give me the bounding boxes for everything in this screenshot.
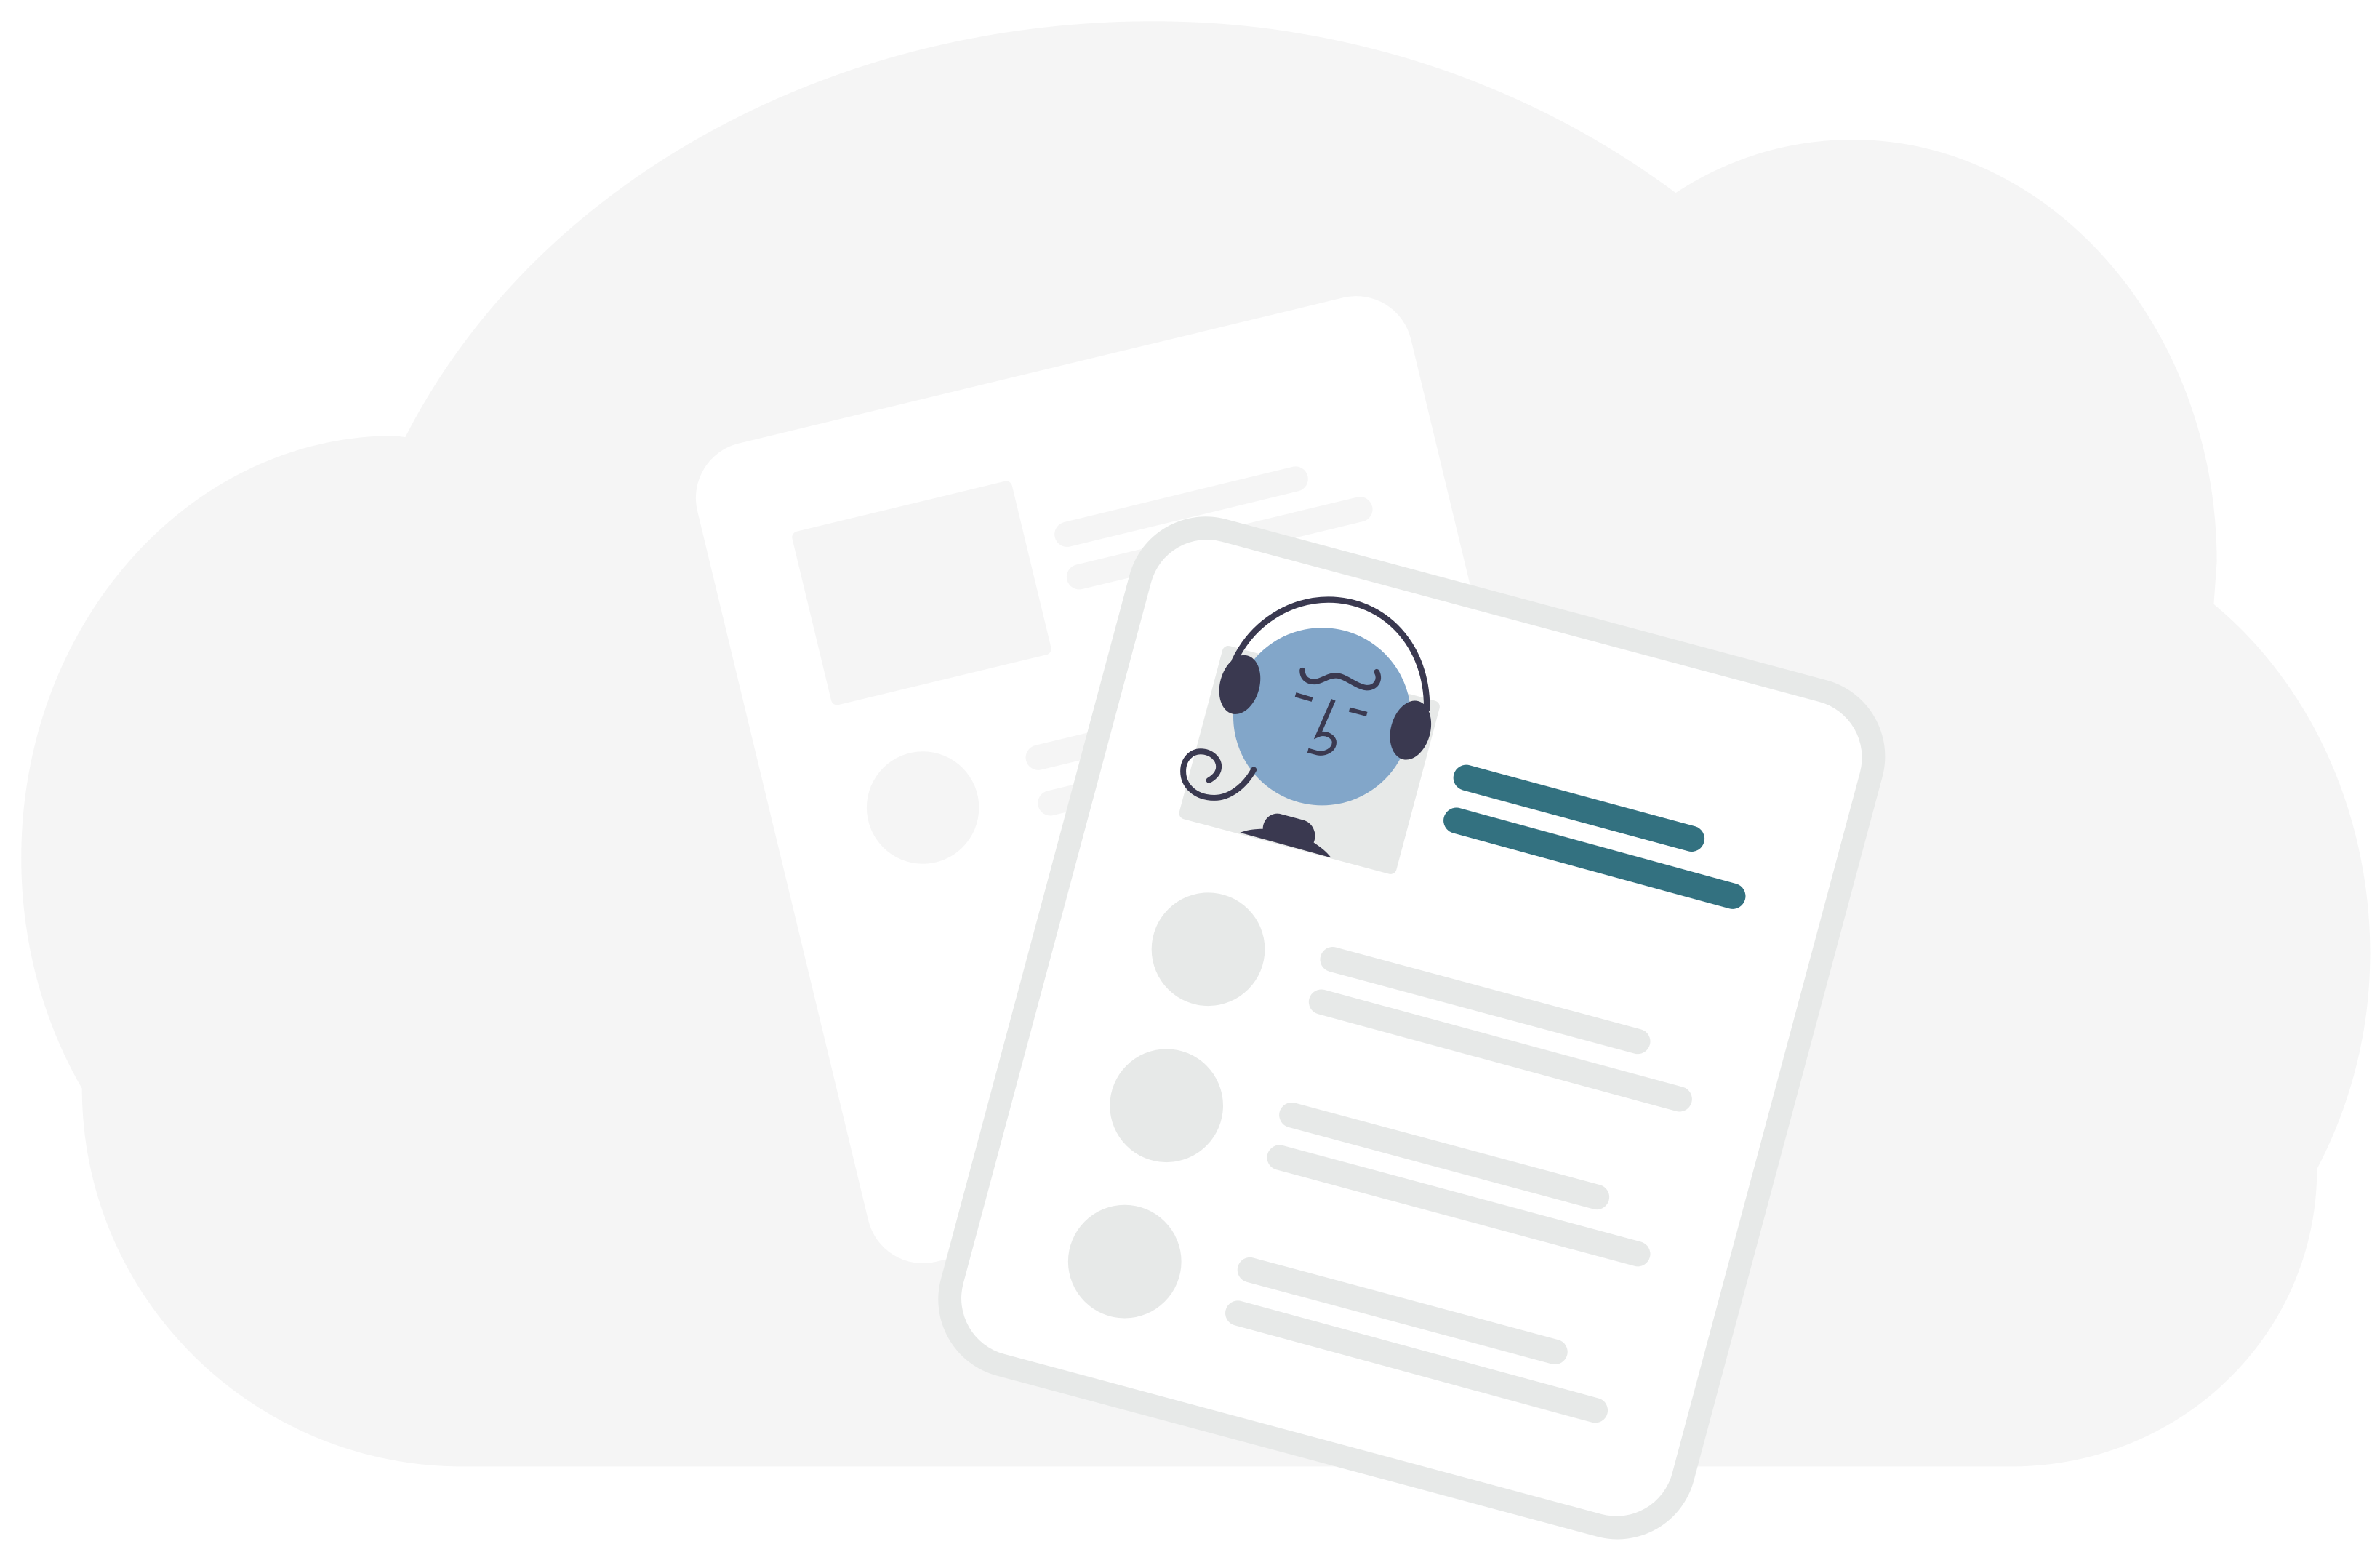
eyes xyxy=(1296,695,1367,714)
list row 2 xyxy=(1110,1049,1638,1254)
front document frame xyxy=(921,499,1903,1557)
headset band xyxy=(1234,600,1427,711)
right ear cup xyxy=(1384,696,1438,764)
front document sheet xyxy=(948,527,1875,1529)
row 1 avatar xyxy=(1152,892,1265,1006)
left ear cup xyxy=(1213,650,1267,719)
back document avatar circle xyxy=(867,751,979,864)
back document image placeholder xyxy=(791,480,1052,706)
eyebrow xyxy=(1302,671,1378,688)
row 3 avatar xyxy=(1068,1205,1182,1318)
row 2 text lines xyxy=(1280,1115,1638,1254)
front document xyxy=(921,499,1903,1557)
teal heading lines xyxy=(1457,777,1733,896)
headset cord xyxy=(1183,751,1254,798)
row 3 text lines xyxy=(1238,1270,1595,1410)
picture background xyxy=(1178,644,1441,876)
back document xyxy=(684,284,1595,1275)
list row 3 xyxy=(1068,1205,1595,1410)
row 2 avatar xyxy=(1110,1049,1223,1162)
profile picture card xyxy=(1178,600,1441,876)
back document heading lines xyxy=(1067,479,1360,577)
face xyxy=(1233,628,1411,805)
person shoulders and neck xyxy=(1240,814,1331,857)
row 1 text lines xyxy=(1321,959,1680,1099)
back document text lines xyxy=(1038,722,1184,803)
back document sheet xyxy=(684,284,1595,1275)
list row 1 xyxy=(1152,892,1680,1099)
nose and mouth xyxy=(1308,700,1334,753)
